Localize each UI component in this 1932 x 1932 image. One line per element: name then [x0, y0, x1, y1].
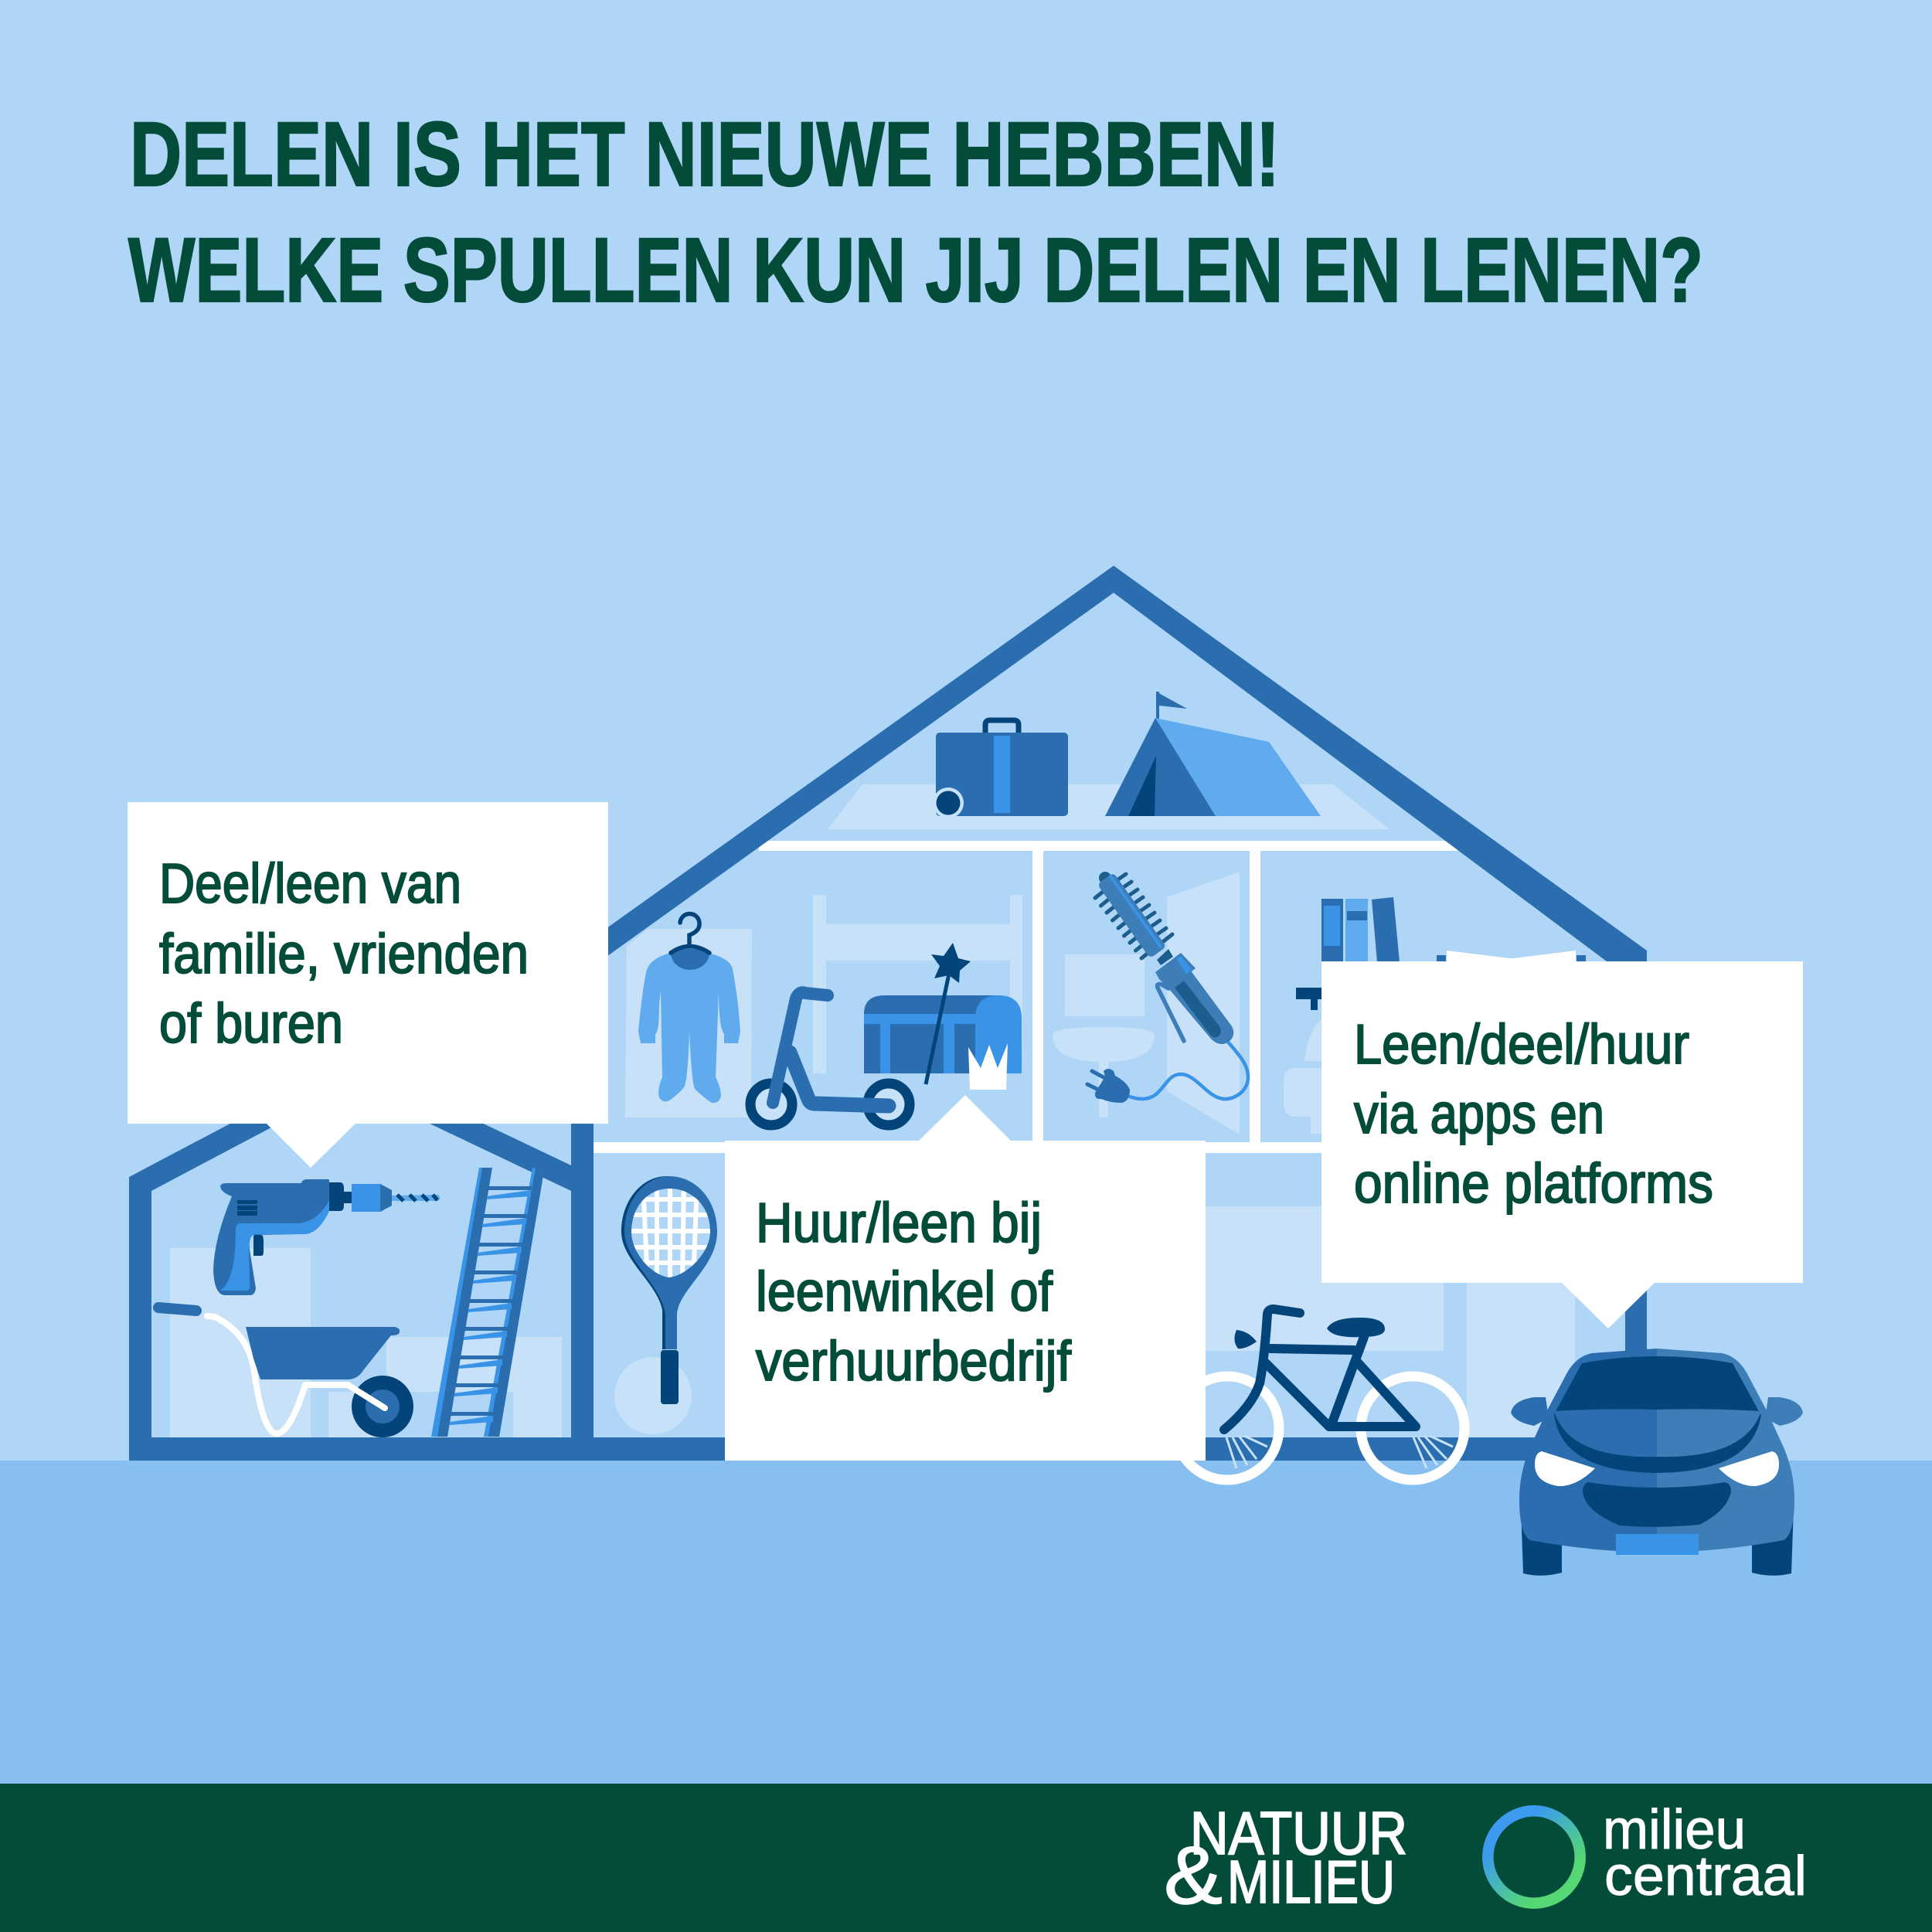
icon: suitcase: [933, 720, 1068, 818]
icon: racket room backdrop and racket: [614, 1176, 717, 1434]
callout: family and friends: familie, vrienden: [159, 923, 529, 985]
callout: rental shop: leenwinkel of: [756, 1261, 1053, 1323]
callout: family and friends: of buren: [159, 993, 343, 1055]
logo: Milieu Centraal ring: [1488, 1811, 1580, 1903]
right wall: [1625, 958, 1647, 1441]
study furniture and books: [1284, 897, 1586, 1134]
footer bar: [0, 1784, 1932, 1932]
hood: [1554, 1409, 1761, 1457]
brush bristles: [1095, 874, 1172, 958]
logo: Milieu Centraal wordmark: centraal: [1604, 1845, 1807, 1907]
windshield: [1554, 1356, 1760, 1414]
brush body: [1097, 872, 1166, 958]
callout: apps and platforms: Leen/deel/huur: [1354, 1014, 1689, 1076]
callout: apps and platforms: via apps en: [1354, 1083, 1604, 1145]
car mirrors: [1511, 1397, 1803, 1426]
icon: curling iron: [1087, 872, 1248, 1103]
plug: [1087, 1069, 1130, 1103]
icon: car: [1511, 1349, 1803, 1576]
grille: [1583, 1482, 1731, 1527]
logo: Natuur en Milieu: NATUUR: [1190, 1799, 1407, 1867]
house structure: [129, 566, 1647, 1461]
bathroom furniture: [1053, 872, 1240, 1134]
main roof: [571, 566, 1647, 985]
title: DELEN IS HET NIEUWE HEBBEN!: [130, 104, 1280, 206]
callout: rental shop: verhuurbedrijf: [756, 1331, 1072, 1393]
attic floor: [828, 784, 1389, 829]
lever: [1158, 985, 1184, 1041]
floors and walls: [594, 841, 1629, 1153]
icon: toy chest: [864, 943, 1022, 1090]
logo: Natuur en Milieu: MILIEU: [1227, 1848, 1395, 1916]
garage shell: [129, 1060, 571, 1441]
left wall: [571, 958, 594, 1441]
car body: [1519, 1349, 1794, 1553]
logo: Milieu Centraal wordmark: [1603, 1799, 1807, 1907]
callout: apps and platforms: online platforms: [1354, 1153, 1713, 1215]
logo: Natuur en Milieu: [1164, 1799, 1407, 1921]
cord: [1128, 1041, 1248, 1099]
headlights: [1535, 1451, 1779, 1486]
title: [128, 104, 1703, 321]
ground: [0, 1461, 1932, 1784]
ground floor furniture: [1206, 1206, 1575, 1437]
icon: bicycle: [1175, 1309, 1464, 1480]
sky background: [0, 0, 1932, 1461]
logo: Milieu Centraal wordmark: milieu: [1603, 1799, 1746, 1861]
logo: Natuur en Milieu: &: [1164, 1830, 1223, 1921]
car wheels: [1521, 1507, 1794, 1576]
floor strip: [129, 1437, 1647, 1461]
icon: ladder: [431, 1168, 544, 1437]
icon: hanger and onesie: [638, 913, 740, 1103]
callout: rental shop: Huur/leen bij: [756, 1192, 1042, 1254]
icon: tent: [1105, 692, 1321, 816]
callout: family and friends: [128, 802, 608, 1168]
callout: rental shop: [725, 1095, 1206, 1461]
handle: [1169, 970, 1233, 1044]
hood shadow: [1554, 1414, 1761, 1473]
callout: family and friends: Deel/leen van: [159, 853, 461, 915]
garage background furniture: [170, 1248, 562, 1437]
number plate: [1616, 1534, 1699, 1555]
bedroom furniture: [625, 895, 1022, 1117]
icon: drill: [213, 1179, 440, 1295]
callout: apps and platforms: [1321, 961, 1803, 1328]
icon: wheelbarrow: [158, 1308, 413, 1437]
icon: kick scooter: [750, 992, 910, 1125]
